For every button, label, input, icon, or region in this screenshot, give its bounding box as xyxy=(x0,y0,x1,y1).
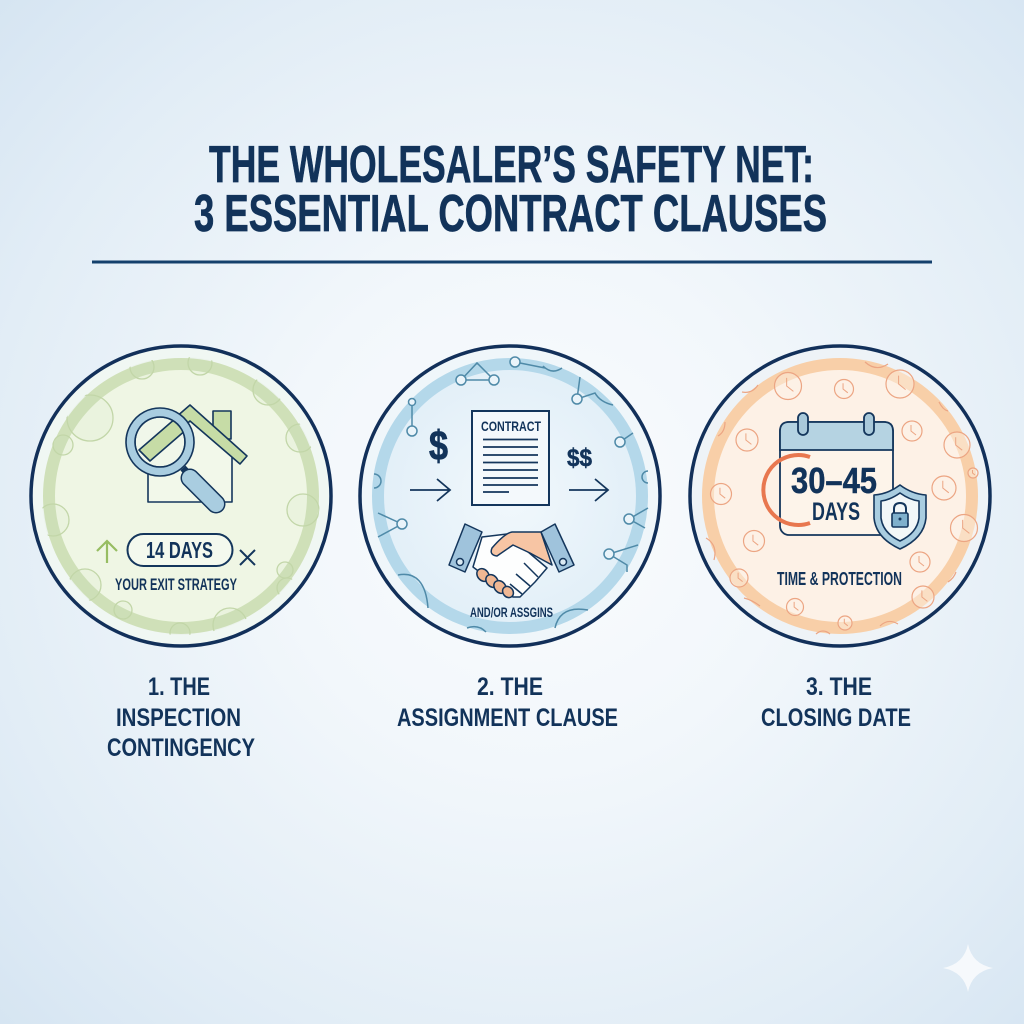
text: 30-45 days xyxy=(791,460,877,526)
label: clause 1: 1. THE xyxy=(148,673,210,701)
label: clause 1: CONTINGENCY xyxy=(107,734,255,762)
panel: assignment clause xyxy=(360,346,660,646)
text: 30-45 days: 30–45 xyxy=(791,460,877,501)
icon: orange progress arc xyxy=(763,455,810,525)
icon: house with magnifier xyxy=(126,405,247,504)
icon: double dollar: $$ xyxy=(567,444,592,472)
arrow: into contract xyxy=(410,479,450,501)
panel: closing date xyxy=(690,346,990,646)
arrow: out of contract xyxy=(569,479,608,501)
icon: sparkle watermark xyxy=(943,944,993,992)
icon: calendar xyxy=(780,413,893,535)
panel: inspection contingency xyxy=(31,346,331,646)
label: clause 3: 3. THE xyxy=(806,673,872,701)
title xyxy=(194,136,827,243)
icon: dollar sign: $ xyxy=(429,422,448,469)
icon: contract document: CONTRACT xyxy=(481,418,541,434)
icon: handshake xyxy=(449,524,574,600)
pattern: bubbles xyxy=(37,351,319,643)
label: clause 2: 2. THE xyxy=(477,673,543,701)
label: clause 2 xyxy=(397,673,618,732)
text: and/or assigns: AND/OR ASSGINS xyxy=(470,604,553,620)
text: your exit strategy: YOUR EXIT STRATEGY xyxy=(115,575,237,594)
label: clause 2: ASSIGNMENT CLAUSE xyxy=(397,704,618,732)
text: 30-45 days: DAYS xyxy=(812,498,860,526)
label: clause 1 xyxy=(107,673,255,762)
pattern: clocks xyxy=(706,362,978,634)
badge: 14 days xyxy=(128,534,232,566)
pattern: network nodes xyxy=(374,357,648,632)
icon: contract document xyxy=(472,411,549,505)
badge: 14 days: 14 DAYS xyxy=(146,537,213,563)
icon: up arrow xyxy=(97,541,117,563)
label: clause 1: INSPECTION xyxy=(116,704,241,732)
label: clause 3: CLOSING DATE xyxy=(761,704,911,732)
text: time and protection: TIME & PROTECTION xyxy=(777,569,902,589)
icon: x mark xyxy=(240,550,255,565)
label: clause 3 xyxy=(761,673,911,732)
icon: shield with lock xyxy=(874,485,926,549)
